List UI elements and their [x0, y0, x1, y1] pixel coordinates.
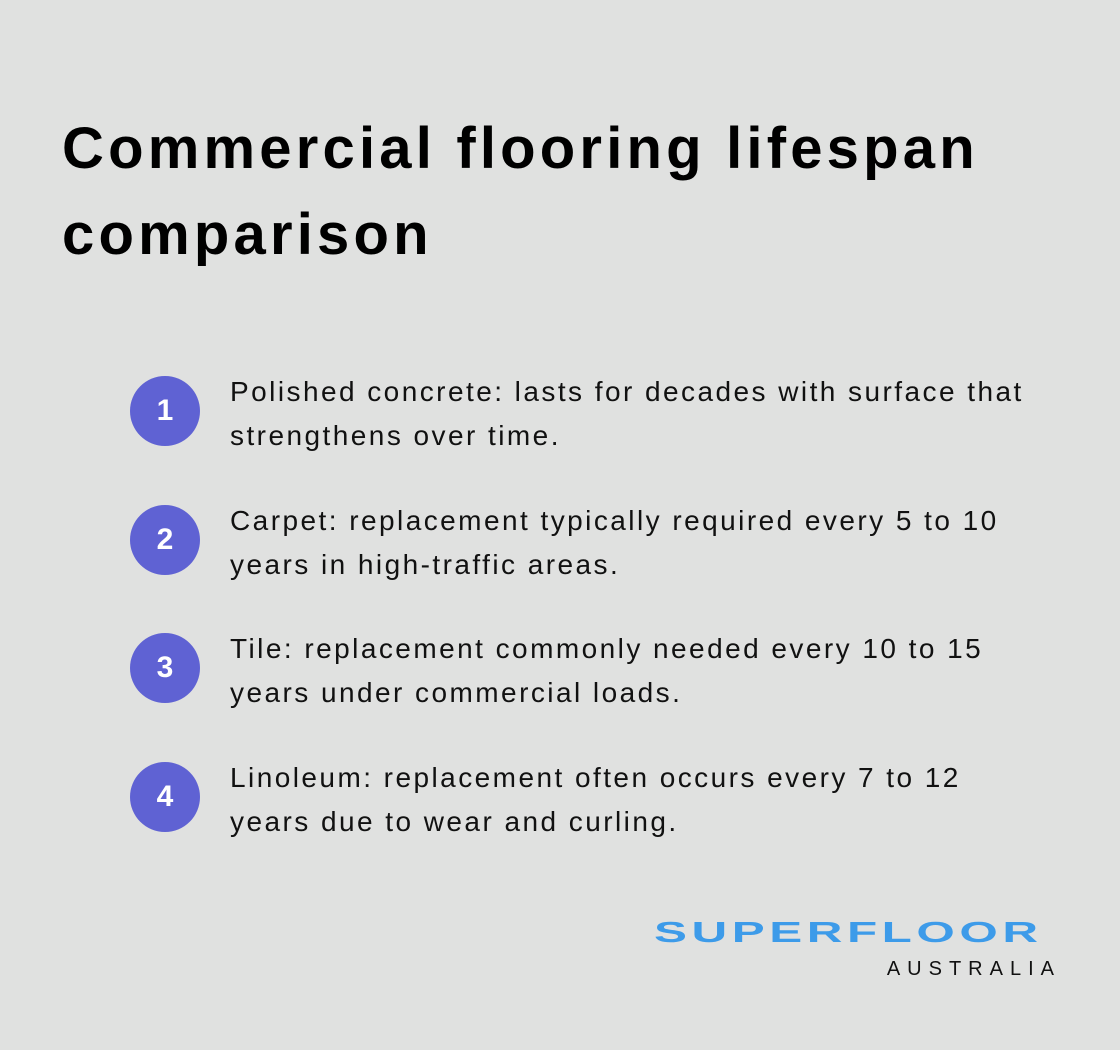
- item 1: [130, 376, 1024, 451]
- number badge 1: 1: [157, 394, 173, 427]
- text 4: years due to wear and curling.: [230, 806, 679, 837]
- text 3: Tile: replacement commonly needed every 10 to 15: [230, 633, 983, 664]
- item 2: [130, 505, 999, 580]
- number badge 1: [130, 376, 200, 446]
- text 4: [230, 762, 961, 837]
- text 2: years in high-traffic areas.: [230, 549, 620, 580]
- text 2: Carpet: replacement typically required every 5 to 10: [230, 505, 999, 536]
- text 1: strengthens over time.: [230, 420, 561, 451]
- number badge 3: 3: [157, 651, 173, 684]
- title: [62, 116, 979, 267]
- text 1: [230, 376, 1024, 451]
- number badge 2: 2: [157, 523, 173, 556]
- text 2: [230, 505, 999, 580]
- text 3: [230, 633, 983, 708]
- title: comparison: [62, 202, 433, 267]
- text 1: Polished concrete: lasts for decades with surface that: [230, 376, 1024, 407]
- number badge 2: [130, 505, 200, 575]
- number badge 3: [130, 633, 200, 703]
- number badge 4: 4: [157, 780, 173, 813]
- logo: AUSTRALIA: [887, 958, 1061, 980]
- text 3: years under commercial loads.: [230, 677, 682, 708]
- title: Commercial flooring lifespan: [62, 116, 979, 181]
- logo: SUPERFLOOR: [654, 917, 1043, 949]
- text 4: Linoleum: replacement often occurs every 7 to 12: [230, 762, 961, 793]
- item 3: [130, 633, 983, 708]
- number badge 4: [130, 762, 200, 832]
- item 4: [130, 762, 961, 837]
- logo: [654, 917, 1061, 980]
